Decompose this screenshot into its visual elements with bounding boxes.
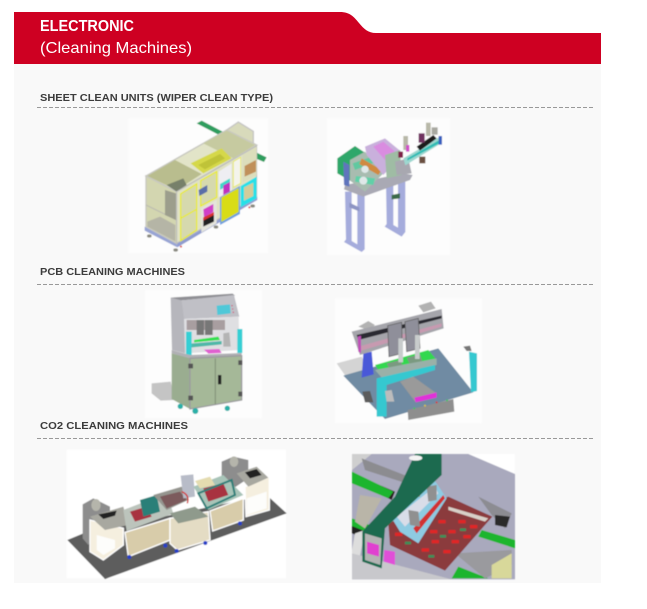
image: co2 cleaning machine line	[67, 450, 287, 579]
image: pcb cleaning machine gantry	[335, 298, 482, 423]
image: pcb cleaning machine cabinet	[145, 290, 262, 418]
header banner	[14, 12, 601, 64]
heading: sheet clean units: SHEET CLEAN UNITS (WIPER CLEAN TYPE)	[40, 92, 273, 104]
heading: pcb cleaning machines: PCB CLEANING MACHINES	[40, 266, 185, 278]
heading: co2 cleaning machines: CO2 CLEANING MACHINES	[40, 420, 188, 432]
title: (Cleaning Machines)	[40, 40, 192, 57]
panel: content background	[14, 64, 601, 583]
image: wiper clean unit on legs	[327, 118, 450, 255]
title: ELECTRONIC	[40, 18, 134, 35]
image: wiper clean unit cabinet	[128, 118, 268, 253]
title	[40, 18, 192, 57]
image: co2 cleaning close-up	[352, 454, 515, 579]
